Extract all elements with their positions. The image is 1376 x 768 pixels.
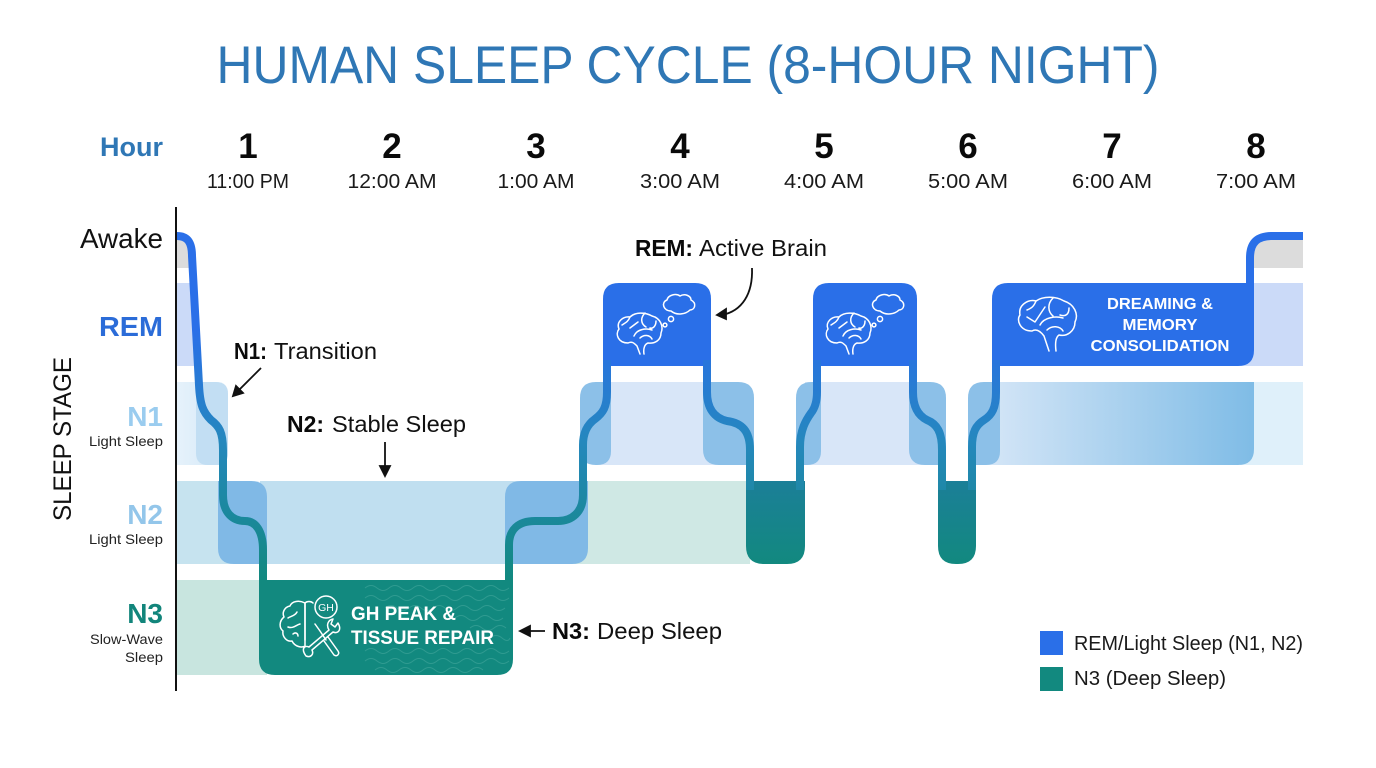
panel: deep sleep block [259,580,513,675]
dreaming block text [1090,296,1230,355]
panel: REM block 3 dreaming [992,283,1254,366]
hour header [100,127,1296,193]
hour 7: 7 [1102,127,1122,166]
stage: N2 [89,499,163,547]
band: N2 [177,481,750,564]
stage: N3: N3 [127,598,163,629]
band: REM [177,283,1303,366]
hour 6: 6 [958,127,978,166]
icon: brain with GH and tools: GH [318,602,334,614]
deep sleep block text: TISSUE REPAIR [351,628,494,649]
annotation: REM active brain: REM: [635,235,693,261]
hour 5 [784,127,864,193]
stage: N3: Slow-Wave [90,631,163,647]
hour 7 [1072,127,1152,193]
icon: brain [1018,297,1076,351]
hour 8: 8 [1246,127,1266,166]
annotation: N3 deep sleep: Deep Sleep [597,618,722,644]
annotation: N2 stable sleep: N2: [287,411,324,437]
hypnogram line [177,236,1303,584]
hour 8: 7:00 AM [1216,171,1296,193]
hour 1: 11:00 PM [207,171,289,193]
hour 2: 2 [382,127,402,166]
stage: N3: Sleep [125,649,163,665]
hour 2 [348,127,436,193]
hour 2: 12:00 AM [348,171,436,193]
hour 6 [928,127,1008,193]
stage: N3 [90,598,163,665]
hour 6: 5:00 AM [928,171,1008,193]
annotation: N1 transition: Transition [274,338,377,364]
hour 4: 3:00 AM [640,171,720,193]
hour 3: 3 [526,127,546,166]
y axis title: SLEEP STAGE [49,357,77,521]
legend swatch: REM/light [1040,631,1063,655]
hour 4 [640,127,720,193]
hour 1: 1 [238,127,258,166]
dreaming block text: CONSOLIDATION [1090,338,1230,355]
stage: N2: N2 [127,499,163,530]
icon: brain and thought cloud [826,295,904,354]
arrow [233,368,261,396]
annotation: N3 deep sleep: N3: [552,618,590,644]
annotation: REM active brain: Active Brain [699,235,827,261]
annotation: N2 stable sleep: Stable Sleep [332,411,466,437]
deep sleep block text [351,604,494,649]
panel: REM block 1 [603,283,711,366]
stage: N1 [89,401,163,449]
dreaming block text: MEMORY [1122,317,1198,334]
axis line [175,207,177,691]
N2 dip block 2 [938,481,976,564]
stage: awake: Awake [80,223,163,254]
annotation: N1 transition: N1: [234,338,267,364]
stage: REM: REM [99,311,163,342]
band: awake [177,240,1303,268]
hour 3 [498,127,574,193]
legend swatch: N3 [1040,667,1063,691]
hour 7: 6:00 AM [1072,171,1152,193]
title: HUMAN SLEEP CYCLE (8-HOUR NIGHT) [216,36,1160,95]
deep sleep block text: GH PEAK & [351,604,456,625]
wave texture [365,586,510,672]
panel: REM block 2 [813,283,917,366]
annotation: REM active brain [635,235,827,319]
annotation: N2 stable sleep [287,411,466,476]
N2 dip block 1 [746,481,805,564]
hour 1 [207,127,289,193]
dreaming block text: DREAMING & [1107,296,1213,313]
arrow [520,626,545,636]
hour 3: 1:00 AM [498,171,574,193]
stage labels [80,223,163,665]
hour 5: 4:00 AM [784,171,864,193]
hour 4: 4 [670,127,690,166]
band: N3 [177,580,267,675]
legend text: N3: N3 (Deep Sleep) [1074,668,1226,690]
stage: N1: Light Sleep [89,433,163,449]
hour 8 [1216,127,1296,193]
legend [1040,631,1303,691]
stage: N1: N1 [127,401,163,432]
background stage bands [177,240,1303,675]
arrow [717,268,752,319]
hour 5: 5 [814,127,834,166]
legend text: REM/light: REM/Light Sleep (N1, N2) [1074,633,1303,655]
annotation: N1 transition [233,338,377,396]
stage: N2: Light Sleep [89,531,163,547]
annotation: N3 deep sleep [520,618,722,644]
icon: brain and thought cloud [617,295,695,354]
band: N1 [177,382,1303,465]
icon: brain with GH and tools [280,596,340,657]
hour label: Hour [100,132,163,162]
arrow [380,442,390,476]
